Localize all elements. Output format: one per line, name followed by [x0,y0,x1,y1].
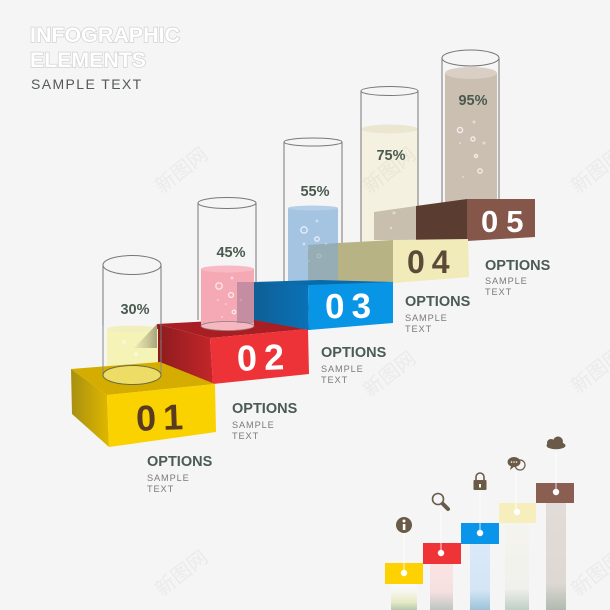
option 3: SAMPLE [321,364,364,374]
block 5 [374,199,535,241]
option 4: TEXT [405,324,432,334]
block 4 [308,239,469,284]
mini step chart [385,436,574,610]
block 2 [157,319,309,384]
olive side [338,240,393,283]
subtitle: SAMPLE TEXT [31,76,143,92]
label 75%: 75% [376,148,406,164]
watermarks: 新图网 [151,143,212,198]
left side [157,324,213,384]
option 1: SAMPLE [147,473,190,483]
label 55%: 55% [300,184,330,200]
front face [308,282,393,330]
number 02: 02 [236,336,292,379]
cylinder 5: 95% [442,50,499,205]
icon: lock [474,473,486,490]
icon: magnifier [432,494,448,509]
number 01: 01 [135,396,191,439]
red block shadow [134,324,157,348]
heading: INFOGRAPHIC [30,23,180,47]
option 2 [232,401,298,441]
cylinder 3: 55% [284,138,342,283]
watermarks: 新图网 [151,546,212,601]
watermarks: 新图网 [359,143,420,198]
label 45%: 45% [216,245,246,261]
front face [107,384,216,447]
cylinder 4: 75% [361,86,418,245]
top [71,362,215,395]
cylinder 1 liquid: 30% [103,256,161,380]
glass base [103,325,161,375]
front face [210,329,309,384]
option 4: SAMPLE [405,313,448,323]
heading: ELEMENTS [30,48,146,72]
option 2: TEXT [232,431,259,441]
number 03: 03 [325,287,378,326]
option 4: OPTIONS [405,294,471,310]
block 1 [71,325,216,447]
cylinder 2: 45% [198,198,256,331]
watermarks: 新图网 [359,347,420,402]
front face [467,199,535,241]
number 04: 04 [407,244,457,280]
title [30,23,180,92]
translucent overlap [237,282,254,323]
option 3: OPTIONS [321,345,387,361]
columns [391,503,566,610]
option 5 [485,258,551,297]
number 05: 05 [481,204,531,239]
left side [254,282,309,330]
block 3 [237,280,393,330]
option 1 [147,454,213,494]
label 30%: 30% [120,302,150,318]
watermarks [151,143,610,601]
translucent overlap [308,243,338,284]
option 5: OPTIONS [485,258,551,274]
connector lines and dots [401,452,559,576]
icon: info [396,517,412,533]
option 2: OPTIONS [232,401,298,417]
option 1: OPTIONS [147,454,213,470]
option 1: TEXT [147,484,174,494]
translucent side [374,206,416,240]
front face [393,239,469,283]
left side [71,369,109,447]
option 3 [321,345,387,385]
label 95%: 95% [458,93,488,109]
option 5: TEXT [485,287,512,297]
top [157,319,308,338]
option 5: SAMPLE [485,276,528,286]
option 2: SAMPLE [232,420,275,430]
icon: chat [508,457,525,470]
top edge [254,280,393,287]
heading [30,23,180,72]
colored boxes [385,483,574,584]
option 3: TEXT [321,375,348,385]
option 4 [405,294,471,334]
dark side [416,199,467,240]
icon: cloud [546,436,566,449]
